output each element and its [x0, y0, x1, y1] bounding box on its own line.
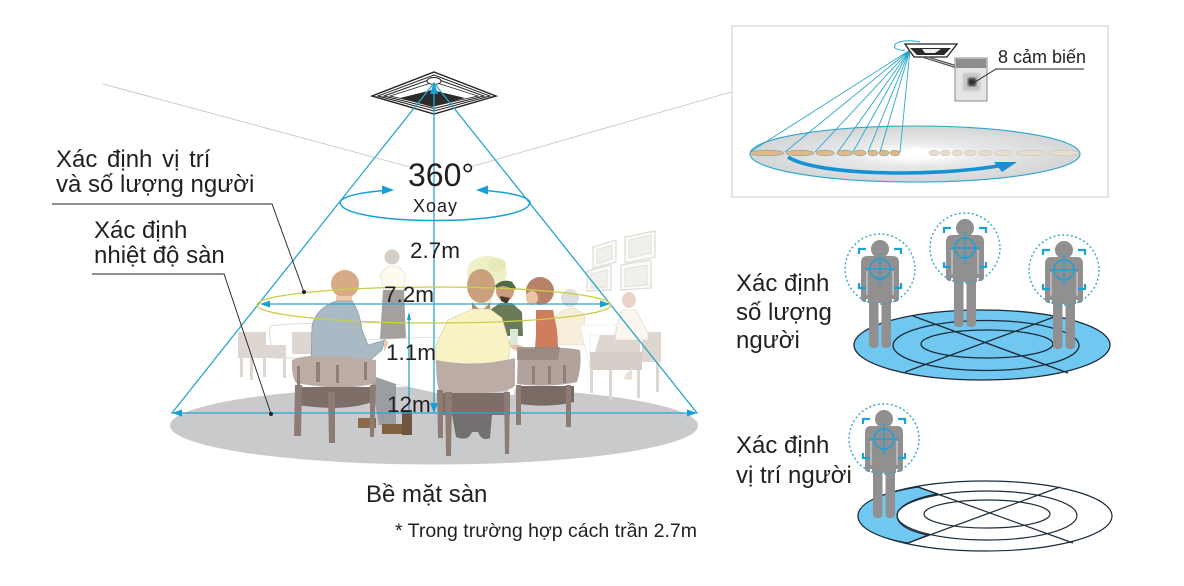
wall pictures [587, 231, 655, 291]
center table [360, 337, 444, 395]
sensor beams [750, 50, 910, 152]
label: position and count: và số lượng người [56, 171, 254, 198]
figure [849, 404, 919, 518]
figure 1 [845, 234, 915, 348]
diner: green shirt man [490, 281, 523, 336]
leader: floor temperature [92, 274, 273, 416]
sensor zones left [750, 150, 900, 156]
label: 7.2m: 7.2m [384, 282, 434, 307]
label: 2.7m: 2.7m [410, 238, 460, 263]
label: 12m: 12m [387, 392, 431, 417]
diner: woman in yellow [436, 269, 516, 395]
plant [467, 256, 507, 315]
label: 360 degrees: 360° [408, 157, 474, 193]
sensor zones right [929, 150, 1079, 156]
label: floor temperature: nhiệt độ sàn [94, 242, 225, 269]
figure 2 [930, 213, 1000, 327]
sensor leader line [975, 69, 1084, 82]
rings diagram [854, 310, 1110, 380]
panel: 8 sensors [732, 26, 1108, 197]
label: count people: Xác định [736, 270, 829, 297]
rings diagram [858, 481, 1112, 551]
small cassette unit [895, 41, 957, 68]
cone arrow tips [172, 82, 697, 416]
sensor closeup [955, 58, 987, 101]
detection cone [172, 83, 697, 413]
rotation arrow [788, 157, 1017, 173]
background chair left [238, 332, 312, 380]
label: position and count: Xác định vị trí [56, 146, 211, 173]
panel: locate people [736, 404, 1112, 551]
label: locate people: Xác định [736, 432, 829, 459]
7.2m width arrow [260, 300, 610, 308]
1.1m height arrow [407, 312, 411, 413]
figure 3 [1029, 235, 1099, 349]
chair left front [292, 356, 376, 443]
floor ellipse [170, 386, 698, 464]
label: count people: số lượng [736, 299, 832, 326]
background chair right [590, 332, 661, 400]
leader: position and count [52, 204, 306, 294]
label: 1.1m: 1.1m [386, 340, 436, 365]
label: count people: người [736, 327, 800, 354]
footnote: * Trong trường hợp cách trần 2.7m [395, 520, 697, 542]
label: rotate: Xoay [413, 196, 458, 216]
man's legs and shoes [358, 375, 412, 435]
cassette unit [372, 72, 496, 114]
background table left [270, 323, 384, 358]
panel: count people [736, 213, 1110, 380]
chair right front [516, 347, 581, 427]
diner: woman in orange [507, 277, 559, 360]
label: locate people: vị trí người [736, 462, 852, 489]
scan floor ellipse [750, 126, 1080, 182]
label: floor temperature: Xác định [94, 217, 187, 244]
waiter [380, 250, 406, 339]
diner: man in blue [311, 270, 388, 366]
grey pointer lines [103, 84, 738, 167]
background diners [553, 289, 648, 380]
restaurant scene [238, 231, 661, 456]
chair center front [436, 358, 515, 456]
rotation ellipse [340, 186, 530, 220]
label: floor surface: Bề mặt sàn [366, 481, 487, 508]
person height ellipse [257, 287, 611, 323]
sensor label: 8 cảm biến [998, 47, 1086, 67]
